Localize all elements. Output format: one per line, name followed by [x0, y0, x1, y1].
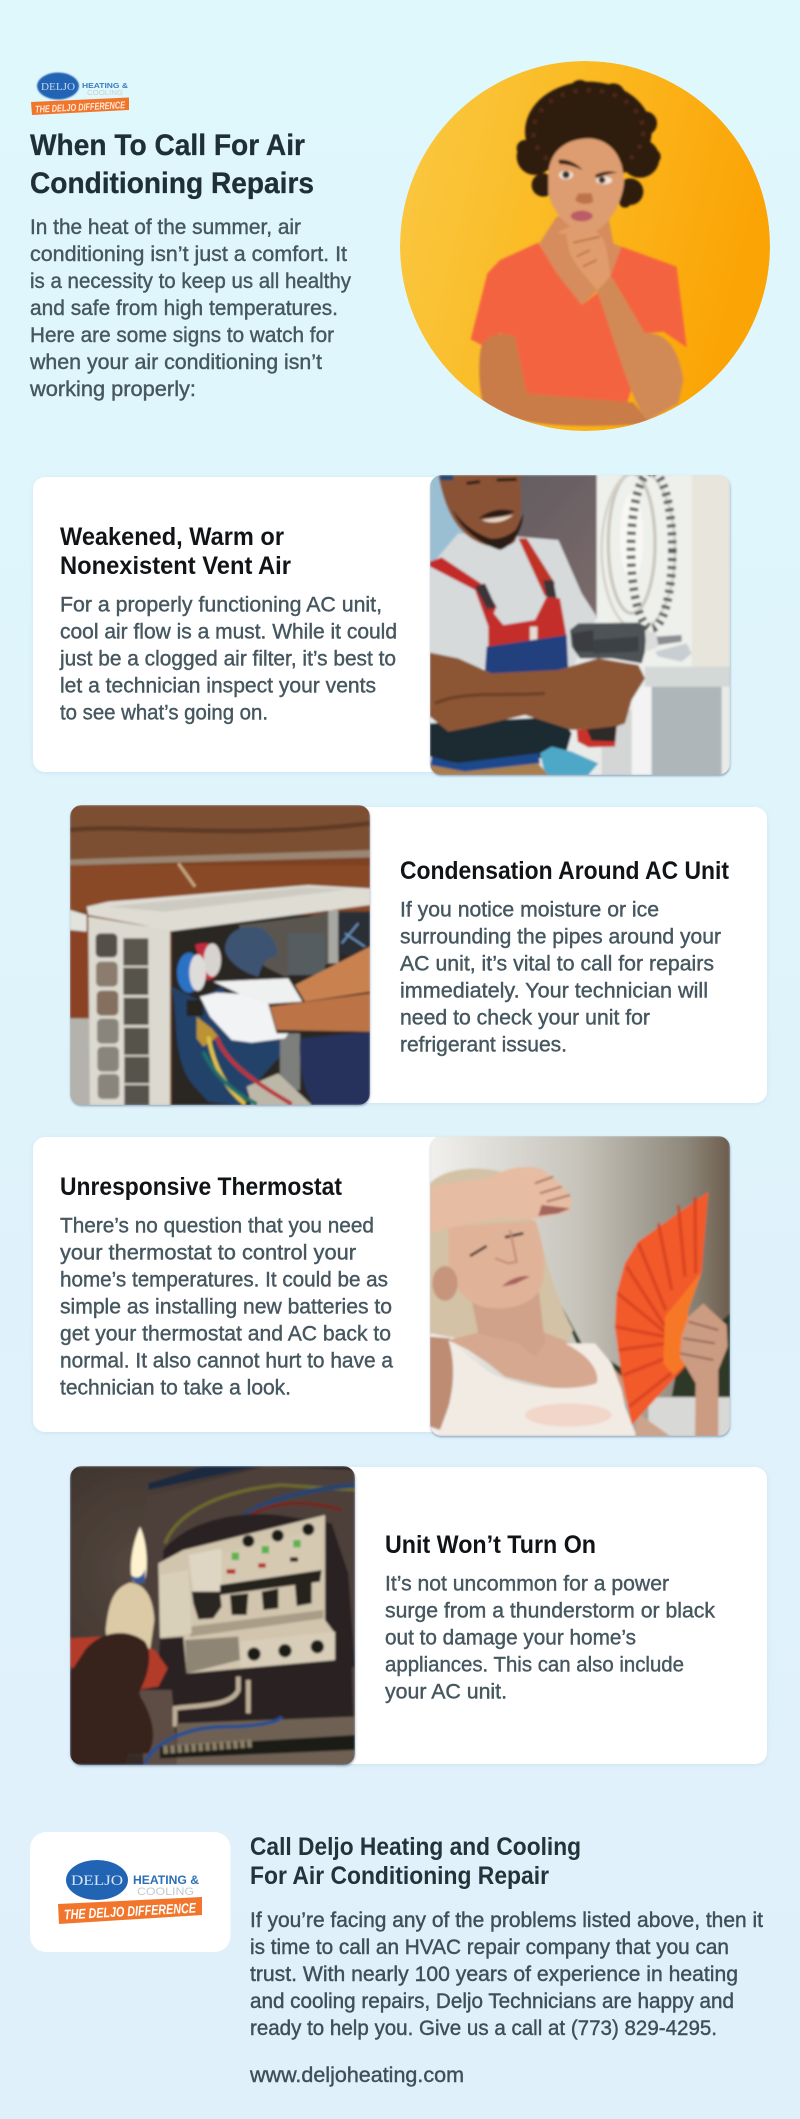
body text 2: immediately. Your technician will	[400, 980, 708, 1002]
photo: technician drilling outdoor AC unit	[430, 470, 730, 775]
card background 1	[33, 477, 453, 772]
body text 2	[400, 898, 721, 1056]
footer body text: If you’re facing any of the problems listed above, then it	[250, 1909, 763, 1932]
body text 2: refrigerant issues.	[400, 1034, 567, 1056]
body text 1	[59, 594, 397, 724]
body text 4: It’s not uncommon for a power	[385, 1572, 669, 1596]
intro text block	[29, 216, 351, 401]
footer heading: For Air Conditioning Repair	[250, 1862, 549, 1890]
hero photo: woman thinking in yellow circle	[400, 61, 770, 431]
footer body text: and cooling repairs, Deljo Technicians are happy and	[250, 1990, 734, 2013]
body text 3	[60, 1214, 393, 1400]
footer body text: ready to help you. Give us a call at (773) 829-4295.	[250, 2017, 717, 2040]
footer logo: Deljo	[58, 1860, 202, 1924]
intro text block: working properly:	[29, 378, 196, 401]
body text 1: cool air flow is a must. While it could	[60, 620, 397, 644]
body text 1: to see what’s going on.	[60, 702, 268, 724]
footer logo: Deljo: COOLING	[137, 1886, 194, 1898]
intro text block: In the heat of the summer, air	[30, 216, 301, 239]
photo: candle in front of electrical panel	[70, 1466, 355, 1765]
photo: gloved hands with gauges on AC unit	[70, 805, 370, 1105]
footer heading	[250, 1833, 581, 1890]
intro text block: Here are some signs to watch for	[30, 324, 334, 347]
heading 3: Unresponsive Thermostat	[60, 1173, 343, 1201]
footer logo box	[30, 1832, 230, 1952]
body text 4: appliances. This can also include	[385, 1654, 684, 1676]
heading 2: Condensation Around AC Unit	[400, 857, 730, 885]
title: When To Call For Air	[30, 129, 305, 162]
logo: header Deljo logo: COOLING	[87, 90, 123, 97]
body text 1: For a properly functioning AC unit,	[60, 594, 382, 616]
card background 2	[350, 807, 767, 1103]
logo: header Deljo logo: HEATING &	[82, 81, 129, 90]
heading 1	[60, 523, 291, 580]
footer body text: is time to call an HVAC repair company that you can	[250, 1936, 729, 1959]
body text 4	[385, 1572, 715, 1704]
heading 1: Nonexistent Vent Air	[60, 552, 291, 580]
panel: weakened, warm or nonexistent vent air	[33, 477, 453, 772]
body text 3: simple as installing new batteries to	[60, 1296, 392, 1318]
body text 3: There’s no question that you need	[60, 1214, 374, 1238]
intro text block: is a necessity to keep us all healthy	[30, 270, 351, 293]
logo: header Deljo logo: THE DELJO DIFFERENCE	[35, 100, 125, 116]
footer logo: Deljo: THE DELJO DIFFERENCE	[64, 1900, 197, 1922]
body text 2: surrounding the pipes around your	[400, 926, 721, 948]
logo: header Deljo logo: DELJO	[41, 81, 75, 93]
photo: woman fanning herself with orange fan	[430, 1136, 730, 1436]
title: Conditioning Repairs	[30, 167, 314, 200]
body text 1: just be a clogged air filter, it’s best to	[59, 648, 396, 670]
body text 1: let a technician inspect your vents	[60, 674, 376, 698]
website url: www.deljoheating.com	[249, 2064, 464, 2087]
logo: header Deljo logo	[31, 72, 129, 116]
body text 4: out to damage your home’s	[385, 1626, 636, 1650]
body text 3: normal. It also cannot hurt to have a	[60, 1350, 393, 1372]
intro text block: when your air conditioning isn’t	[29, 351, 322, 374]
panel: unresponsive thermostat	[33, 1137, 453, 1432]
body text 2: AC unit, it’s vital to call for repairs	[400, 952, 714, 976]
body text 2: If you notice moisture or ice	[400, 898, 659, 922]
footer heading: Call Deljo Heating and Cooling	[250, 1833, 581, 1861]
intro text block: conditioning isn’t just a comfort. It	[30, 243, 347, 266]
intro text block: and safe from high temperatures.	[30, 297, 338, 320]
body text 4: your AC unit.	[385, 1680, 507, 1704]
footer body text	[250, 1909, 763, 2040]
footer body text: trust. With nearly 100 years of experience in heating	[250, 1963, 738, 1986]
title	[30, 129, 314, 200]
body text 2: need to check your unit for	[400, 1006, 650, 1030]
body text 4: surge from a thunderstorm or black	[385, 1600, 715, 1622]
panel: condensation around AC unit	[350, 807, 767, 1103]
footer logo: Deljo: HEATING &	[133, 1873, 199, 1887]
card background 4	[330, 1467, 767, 1764]
body text 3: home’s temperatures. It could be as	[60, 1268, 388, 1292]
body text 3: your thermostat to control your	[60, 1242, 356, 1264]
panel: unit won't turn on	[330, 1467, 767, 1764]
body text 3: technician to take a look.	[60, 1376, 291, 1400]
body text 3: get your thermostat and AC back to	[60, 1322, 391, 1346]
card background 3	[33, 1137, 453, 1432]
heading 1: Weakened, Warm or	[60, 523, 284, 551]
footer logo: Deljo: DELJO	[71, 1873, 123, 1889]
heading 4: Unit Won’t Turn On	[385, 1531, 596, 1559]
